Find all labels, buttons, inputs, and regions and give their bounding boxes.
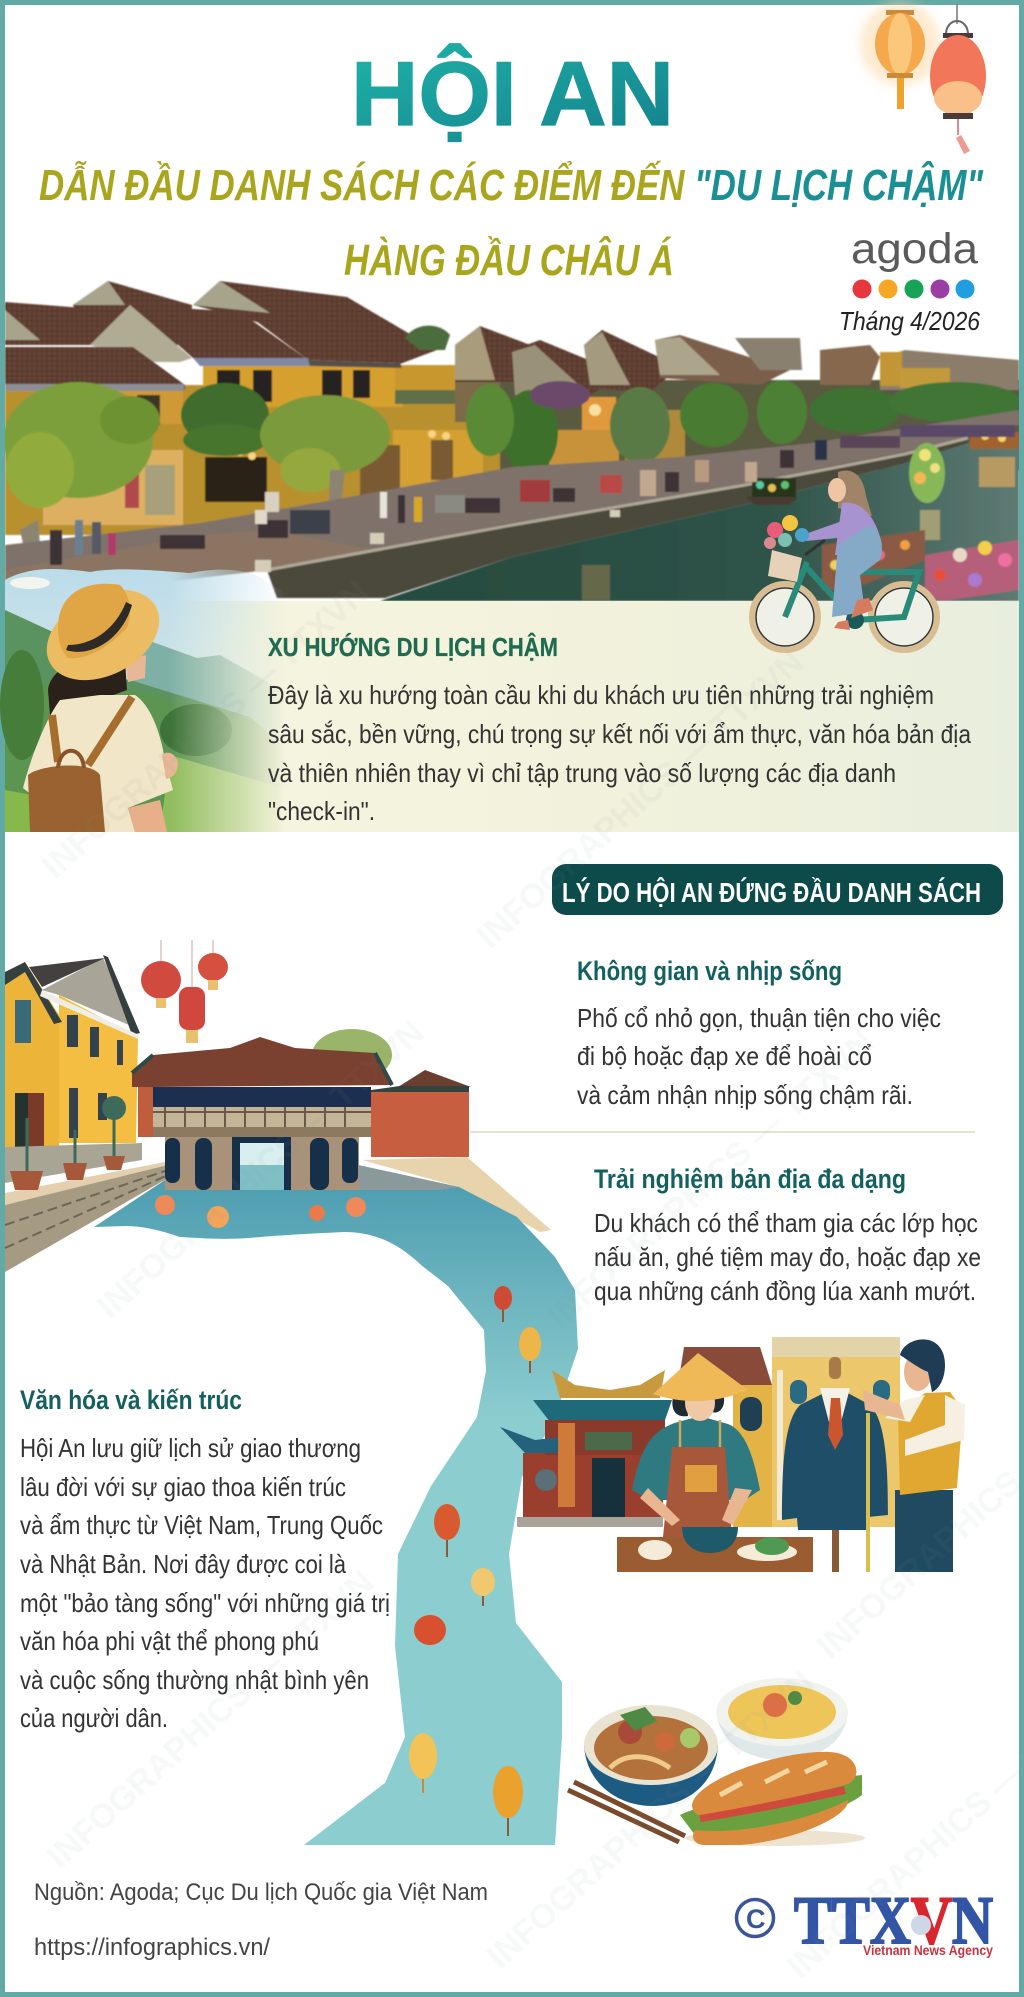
- reason 3: culture and architecture: và ẩm thực từ Việt Nam, Trung Quốc: [20, 1510, 383, 1540]
- photo: embankment: [267, 437, 968, 598]
- watermarks: [35, 573, 1024, 1986]
- reason 1: space and pace of life: Không gian và nhịp sống: [577, 956, 842, 986]
- logo: TTXVN Vietnam News Agency: TTXVN: [794, 1882, 993, 1958]
- photo: river: [380, 432, 1019, 601]
- reason 1: space and pace of life: [577, 956, 941, 1110]
- pho bowl, blue: [584, 1705, 718, 1806]
- reason 3: culture and architecture: Hội An lưu giữ lịch sử giao thương: [20, 1433, 361, 1463]
- reason 3: culture and architecture: [20, 1385, 390, 1733]
- cook: [632, 1353, 760, 1537]
- photo: lantern boats: [745, 432, 1019, 600]
- banh mi: [680, 1752, 865, 1846]
- illustration: Vietnamese food: [568, 1678, 865, 1846]
- cooking table: [617, 1527, 813, 1572]
- photo: tree line: [502, 380, 1021, 474]
- river: [94, 1165, 578, 1845]
- footer source: [34, 1879, 488, 1961]
- stone wall: [5, 1162, 168, 1272]
- agoda logo: agoda: [851, 225, 978, 273]
- illustration: woman cycling: [752, 470, 937, 650]
- river lanterns: [409, 1286, 541, 1836]
- reason 2: diverse local experience: Trải nghiệm bản địa đa dạng: [594, 1164, 906, 1194]
- illustration: cook and tailor: [500, 1337, 965, 1572]
- red lanterns: [141, 940, 228, 1043]
- subtitle: HÀNG ĐẦU CHÂU Á: [344, 235, 674, 285]
- bicycle: [752, 540, 937, 650]
- bridge: [132, 1029, 471, 1190]
- footer source: https://infographics.vn/: [34, 1934, 270, 1961]
- heading: XU HƯỚNG DU LỊCH CHẬM: [268, 632, 558, 662]
- watermarks: INFOGRAPHICS — TTXVN: [540, 1023, 881, 1336]
- reason 2: diverse local experience: qua những cánh đồng lúa xanh mướt.: [594, 1276, 976, 1306]
- body text: và thiên nhiên thay vì chỉ tập trung vào số lượng các địa danh: [268, 758, 896, 788]
- watermarks: INFOGRAPHICS — TTXVN: [480, 1663, 821, 1976]
- photo: Hoi An riverside street: [3, 281, 1021, 601]
- traveler body: [23, 655, 178, 832]
- reason 2: diverse local experience: nấu ăn, ghé tiệm may đo, hoặc đạp xe: [594, 1242, 981, 1272]
- photo: shopfronts with warm lights: [43, 404, 601, 525]
- photo: road: [5, 410, 1019, 572]
- reason 3: culture and architecture: Văn hóa và kiến trúc: [20, 1385, 242, 1415]
- tailor: [863, 1339, 965, 1572]
- watermarks: INFOGRAPHICS — TTXVN: [90, 1013, 431, 1326]
- watermarks: INFOGRAPHICS — TTXVN: [40, 1563, 381, 1876]
- reason 3: culture and architecture: văn hóa phi vật thể phong phú: [20, 1626, 319, 1656]
- dark tile building: [678, 1347, 773, 1527]
- river bank wall: [358, 1165, 459, 1190]
- yellow house: [5, 955, 142, 1190]
- temple: [500, 1370, 672, 1527]
- photo: crowd and scooters: [50, 425, 1015, 572]
- illustration: river with Japanese bridge: [5, 940, 578, 1845]
- reason 1: space and pace of life: Phố cổ nhỏ gọn, thuận tiện cho việc: [577, 1003, 941, 1033]
- watermarks: INFOGRAPHICS — TTXVN: [470, 643, 811, 956]
- subtitle: [39, 159, 984, 285]
- photo: street trees: [5, 381, 514, 544]
- suit on mannequin: [782, 1357, 888, 1572]
- panel: slow travel trend: [0, 569, 1019, 832]
- straw hat: [31, 572, 175, 698]
- body text: "check-in".: [268, 796, 375, 826]
- reason 3: culture and architecture: và Nhật Bản. Nơi đây được coi là: [20, 1549, 346, 1579]
- reason 3: culture and architecture: của người dân.: [20, 1703, 168, 1733]
- section banner: [552, 864, 1003, 915]
- reason 3: culture and architecture: lâu đời với sự giao thoa kiến trúc: [20, 1472, 346, 1502]
- body text: [268, 680, 971, 826]
- footer source: Nguồn: Agoda; Cục Du lịch Quốc gia Việt Nam: [34, 1879, 488, 1906]
- floating lanterns on water: [155, 1195, 366, 1228]
- agoda logo: [851, 225, 978, 298]
- photo: base walls: [5, 362, 1020, 535]
- reason 1: space and pace of life: đi bộ hoặc đạp xe để hoài cổ: [577, 1041, 872, 1071]
- logo: TTXVN Vietnam News Agency: Vietnam News Agency: [863, 1942, 993, 1958]
- basket with flowers: [764, 515, 809, 582]
- watermarks: INFOGRAPHICS: [810, 1463, 1024, 1666]
- reason 3: culture and architecture: và cuộc sống thường nhật bình yên: [20, 1665, 369, 1695]
- body text: Đây là xu hướng toàn cầu khi du khách ưu tiên những trải nghiệm: [268, 680, 934, 710]
- logo: TTXVN Vietnam News Agency: C: [746, 1904, 766, 1934]
- watermarks: INFOGRAPHICS — TTXVN: [35, 573, 376, 886]
- reason 2: diverse local experience: Du khách có thể tham gia các lớp học: [594, 1208, 978, 1238]
- icon: hanging lanterns: [860, 2, 986, 154]
- sand bank: [362, 1157, 551, 1232]
- noodle bowl, white: [716, 1678, 848, 1760]
- title: HỘI AN: [351, 43, 674, 145]
- rider: [806, 470, 882, 630]
- colonial building: [772, 1337, 900, 1527]
- photo: tiled roofs: [5, 281, 1019, 395]
- reason 1: space and pace of life: và cảm nhận nhịp sống chậm rãi.: [577, 1080, 913, 1110]
- photo: reflections: [582, 457, 1015, 600]
- reason 3: culture and architecture: một "bảo tàng sống" với những giá trị: [20, 1588, 390, 1618]
- chopsticks: [568, 1782, 685, 1842]
- date: Tháng 4/2026: [839, 306, 980, 336]
- reason 2: diverse local experience: [594, 1164, 981, 1306]
- illustration: traveler with straw hat in mountains: [0, 569, 300, 832]
